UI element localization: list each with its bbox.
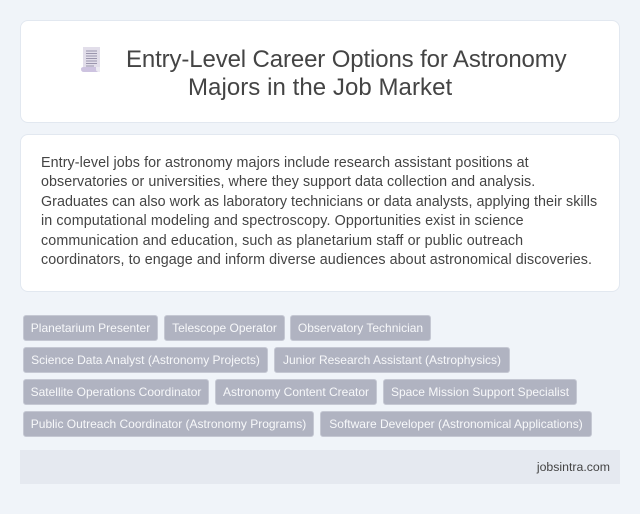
description text [41, 155, 597, 268]
text: Satellite Operations Coordinator [31, 385, 201, 399]
text: in computational modeling and spectroscopy. Opportunities exist in science [41, 213, 524, 229]
text: Public Outreach Coordinator (Astronomy Programs) [31, 417, 306, 431]
tag list [23, 315, 592, 437]
text: Junior Research Assistant (Astrophysics) [283, 353, 501, 367]
panel: description [20, 134, 620, 292]
text: Entry-level jobs for astronomy majors include research assistant positions at [41, 155, 529, 171]
footer bar [20, 450, 620, 484]
text: Software Developer (Astronomical Applications) [329, 417, 583, 431]
text: Entry-Level Career Options for Astronomy [126, 46, 567, 73]
title [126, 46, 567, 101]
icon: paper scroll [81, 47, 100, 72]
panel: header [20, 20, 620, 123]
text: observatories or universities, where they support data collection and analysis. [41, 174, 535, 190]
text: communication and education, such as planetarium staff or public outreach [41, 233, 523, 249]
text: coordinators, to engage and inform diverse audiences about astronomical discoveries. [41, 252, 592, 268]
text: Telescope Operator [172, 321, 277, 335]
text: Majors in the Job Market [188, 74, 452, 101]
text: Science Data Analyst (Astronomy Projects) [31, 353, 260, 367]
footer source text: jobsintra.com [537, 460, 610, 474]
text: Planetarium Presenter [31, 321, 150, 335]
text: Astronomy Content Creator [223, 385, 369, 399]
text: Observatory Technician [298, 321, 423, 335]
text: Graduates can also work as laboratory technicians or data analysts, applying their skills [41, 194, 597, 210]
text: Space Mission Support Specialist [391, 385, 569, 399]
